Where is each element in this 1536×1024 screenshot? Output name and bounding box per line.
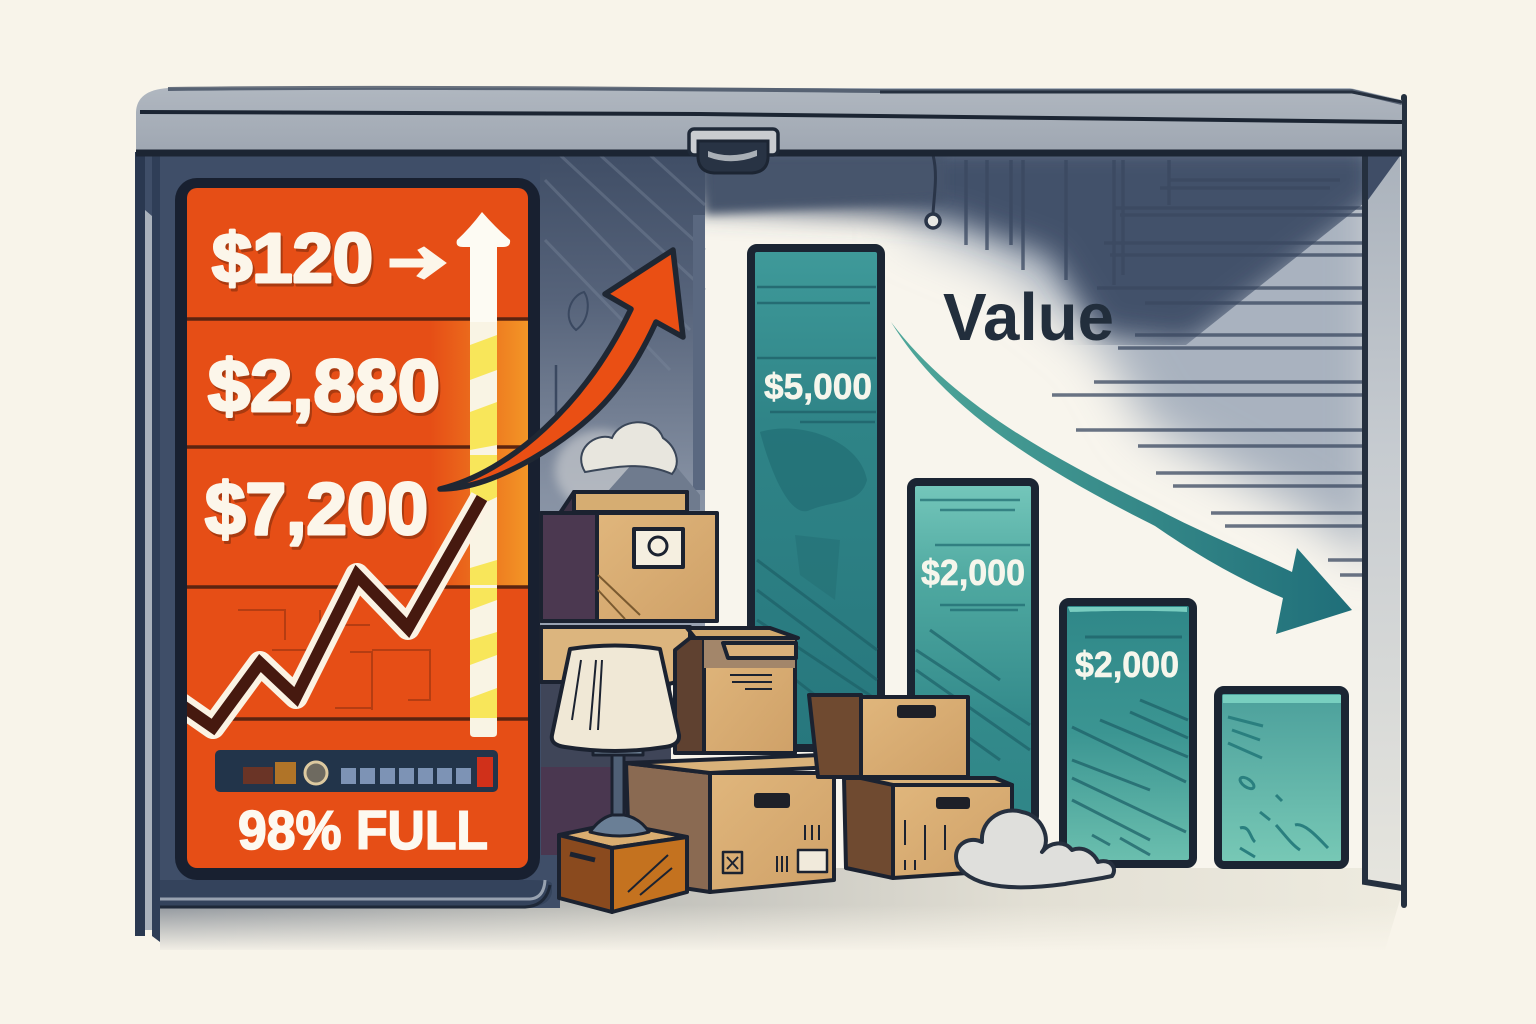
line chart: rising cost (180, 498, 482, 727)
box: top (541, 492, 717, 621)
icon: ceiling pull cord (926, 155, 940, 228)
box: small orange (559, 823, 687, 912)
box: wide lid behind lamp (541, 627, 690, 684)
floor (150, 868, 1410, 953)
progress column (457, 212, 510, 737)
box: right lower (844, 778, 1012, 878)
box: right upper (809, 695, 968, 777)
bar: 2000 second (1063, 602, 1193, 864)
arrow: falling value (891, 322, 1352, 634)
storage unit back wall (705, 156, 1362, 577)
dust cloud on floor (956, 810, 1114, 887)
bar: 2000 second: $2,000 (1075, 644, 1179, 685)
bar: 5000: $5,000 (764, 366, 872, 407)
panel: rising cost (175, 178, 540, 880)
box: bottom large (626, 755, 834, 892)
storage gauge (215, 750, 498, 792)
box: middle (675, 628, 798, 753)
arrow: rising cost (440, 250, 683, 489)
value heading: Value (943, 280, 1114, 355)
capacity label: 98% FULL (238, 799, 488, 861)
bar: 2000 first: $2,000 (921, 552, 1025, 593)
door handle (689, 129, 778, 173)
icon: lamp (552, 646, 679, 836)
icon: small arrow (390, 247, 446, 279)
cumulative cost: $7,200 (205, 469, 428, 550)
moving boxes and lamp (541, 492, 1012, 912)
bar: unlabeled (1218, 690, 1345, 865)
yearly cost: $2,880 (208, 346, 440, 427)
bar chart: declining value (751, 248, 1345, 865)
bar: 2000 first (911, 482, 1035, 822)
rent per month: $120 (212, 219, 373, 297)
right door post (1365, 97, 1404, 905)
left dark interior (137, 150, 705, 908)
dust cloud behind boxes (555, 422, 700, 510)
bar: 5000 (751, 248, 881, 748)
top door header (136, 88, 1402, 155)
left door track (135, 152, 552, 942)
